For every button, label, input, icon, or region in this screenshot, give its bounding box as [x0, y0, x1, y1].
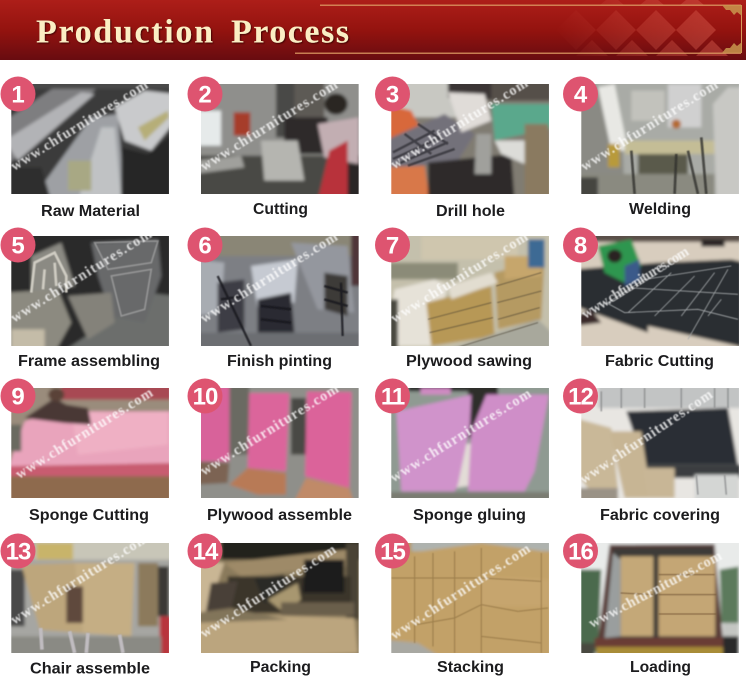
badge 6 [188, 228, 222, 262]
badge 9: 9 [11, 384, 25, 410]
photo: stacked cartons: www.chfurnitures.com [388, 541, 533, 643]
badge 4 [563, 76, 598, 112]
badge 13: 13 [6, 538, 31, 566]
photo: pink boards on chairs [201, 388, 359, 498]
header banner [0, 0, 746, 60]
photo: raw material [11, 84, 169, 194]
photo: painted frames: www.chfurnitures.com [198, 229, 341, 327]
step 16: Loading [563, 534, 746, 676]
step 1: Raw Material [0, 76, 176, 220]
step 9: Sponge Cutting [0, 378, 176, 524]
photo: fabric on floor [581, 236, 739, 346]
label: Plywood assemble [207, 507, 352, 524]
badge 8: 8 [574, 232, 587, 260]
badge 12: 12 [568, 384, 593, 410]
label: Chair assemble [30, 660, 150, 678]
step 12: Fabric covering [563, 378, 746, 524]
badge 15: 15 [380, 538, 405, 566]
step 15: Stacking [375, 534, 556, 676]
photo: plywood stacks: www.chfurnitures.com [388, 229, 531, 327]
title: Process [231, 14, 349, 51]
badge 7: 7 [386, 232, 399, 260]
badge 1 [0, 76, 36, 112]
title [36, 14, 349, 51]
label: Loading [630, 659, 691, 676]
badge 10: 10 [193, 384, 218, 410]
photo: cutting machine [201, 84, 359, 194]
label: Sponge gluing [413, 507, 526, 524]
badge 16: 16 [568, 538, 593, 566]
photo: drill: www.chfurnitures.com [388, 75, 531, 173]
label: Raw Material [41, 203, 140, 220]
step 7: Plywood sawing [375, 228, 556, 370]
photo: painted frames [201, 236, 359, 346]
badge 3: 3 [386, 82, 399, 108]
badge 15 [375, 534, 410, 568]
photo: cutting machine: www.chfurnitures.com [198, 77, 341, 175]
photo: container loading [581, 543, 739, 653]
photo: pink boards on chairs: www.chfurnitures.com [198, 381, 342, 479]
badge 11: 11 [381, 384, 405, 410]
badge 3 [375, 76, 410, 112]
badge 12 [563, 378, 598, 414]
step 5: Frame assembling [0, 226, 176, 370]
label: Welding [629, 201, 691, 218]
photo: assembled chairs: www.chfurnitures.com [8, 531, 151, 628]
step 4: Welding [563, 76, 746, 218]
step 10: Plywood assemble [188, 378, 365, 524]
photo: container loading: www.chfurnitures.com [586, 548, 725, 632]
badge 9 [0, 378, 36, 414]
photo: drill [391, 84, 549, 194]
label: Stacking [437, 659, 504, 676]
label: Fabric Cutting [605, 353, 714, 370]
title: Production [36, 14, 213, 51]
photo: chair frames [11, 236, 169, 346]
badge 6: 6 [198, 232, 212, 260]
badge 2 [188, 76, 222, 112]
photo: pink sponge: www.chfurnitures.com [13, 385, 156, 483]
photo: raw material: www.chfurnitures.com [8, 77, 151, 175]
step 13: Chair assemble [0, 531, 176, 678]
badge 10 [188, 378, 222, 414]
label: Sponge Cutting [29, 507, 149, 524]
badge 1: 1 [11, 82, 25, 108]
badge 5: 5 [11, 232, 25, 260]
step 11: Sponge gluing [375, 378, 556, 524]
label: Finish pinting [227, 353, 332, 370]
photo: fabric on floor: www.chfurnitures.com [579, 244, 692, 323]
photo: upholstered chairs: www.chfurnitures.com [577, 387, 716, 488]
badge 4: 4 [574, 82, 588, 108]
photo: welding [581, 84, 739, 194]
label: Cutting [253, 201, 308, 218]
step 14: Packing [188, 534, 365, 676]
label: Fabric covering [600, 507, 720, 524]
step 8: Fabric Cutting [563, 228, 746, 370]
badge 11 [375, 378, 410, 414]
photo: chair frames: www.chfurnitures.com [8, 226, 155, 326]
photo: assembled chairs [11, 543, 169, 653]
badge 5 [0, 228, 36, 262]
label: Plywood sawing [406, 353, 532, 370]
badge 14 [188, 534, 222, 568]
label: Frame assembling [18, 353, 160, 370]
photo: welding: www.chfurnitures.com [578, 77, 721, 175]
badge 14: 14 [193, 538, 219, 566]
step 3: Drill hole [375, 75, 556, 220]
badge 2: 2 [198, 82, 212, 108]
photo: pink chair backs: www.chfurnitures.com [387, 386, 534, 486]
label: Drill hole [436, 203, 505, 220]
label: Packing [250, 659, 311, 676]
photo: plywood stacks [391, 236, 549, 346]
badge 13 [0, 534, 36, 568]
step 2: Cutting [188, 76, 365, 218]
step 6: Finish pinting [188, 228, 365, 370]
badge 16 [563, 534, 598, 568]
badge 7 [375, 228, 410, 262]
badge 8 [563, 228, 598, 262]
photo: packing carton: www.chfurnitures.com [197, 542, 339, 642]
